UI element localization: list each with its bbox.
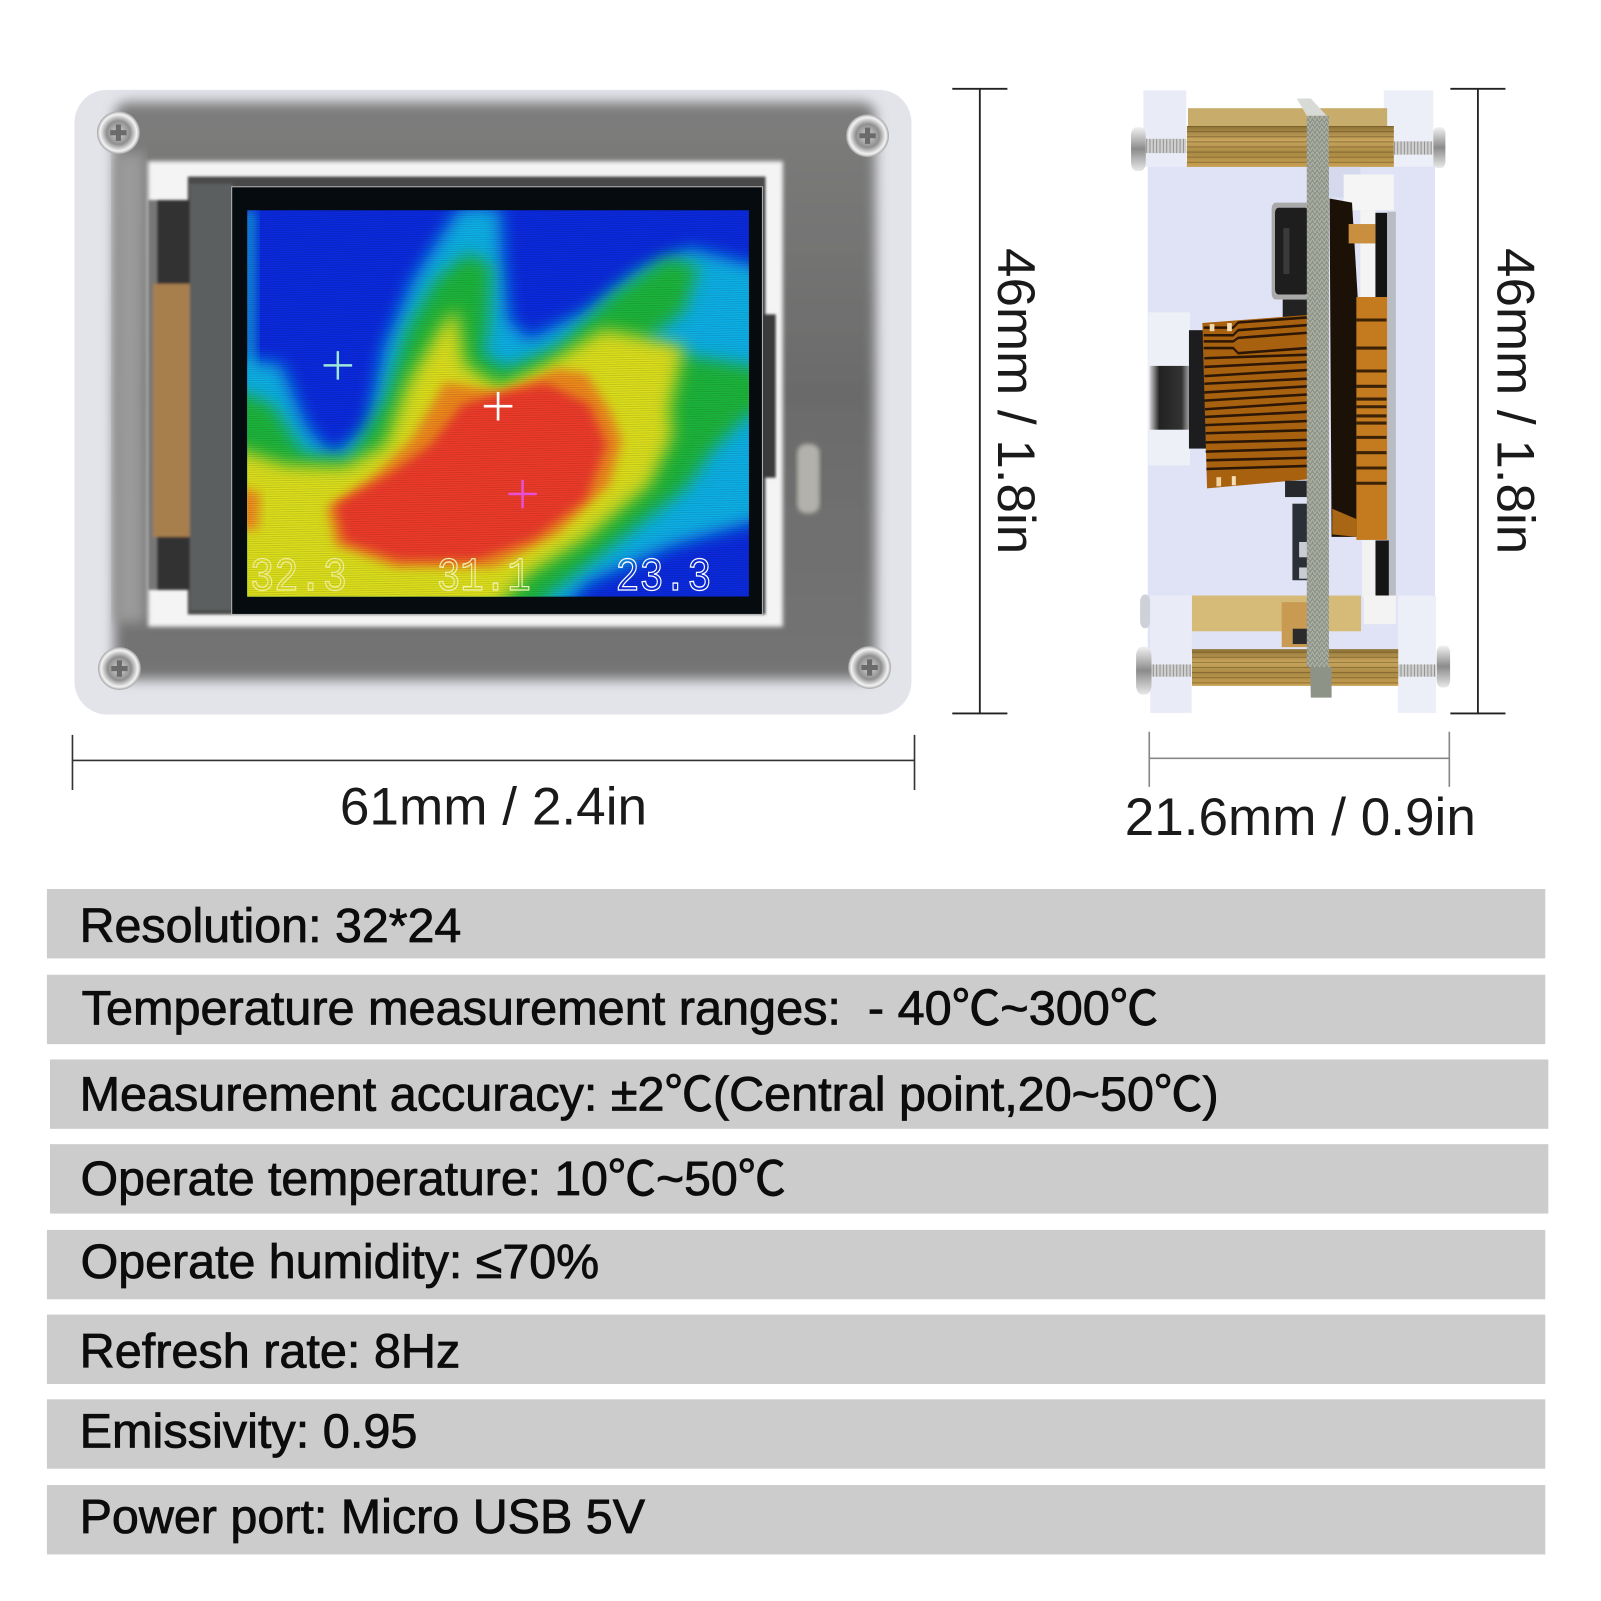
dark centre of the shell — [114, 102, 876, 680]
lens acrylic reflection — [1148, 312, 1209, 465]
screw: top right — [846, 114, 889, 157]
spec row: resolution — [47, 889, 1545, 958]
spec row: refresh rate: Refresh rate: 8Hz — [80, 1326, 460, 1379]
spec row: operating temperature: Operate temperature: 10℃~50℃ — [81, 1153, 786, 1206]
depth label: 21.6mm / 0.9in — [1125, 788, 1476, 847]
height label, front: 46mm / 1.8in — [986, 248, 1045, 554]
spec row: operating temperature — [50, 1144, 1548, 1214]
spec row: accuracy — [50, 1059, 1548, 1129]
front view of the device — [75, 90, 911, 714]
spec row: emissivity: Emissivity: 0.95 — [80, 1405, 417, 1458]
bottom left acrylic block — [1150, 596, 1192, 713]
left ribbon cable — [1202, 315, 1308, 497]
lighter left side of the shell — [114, 153, 145, 623]
small circuit board — [1282, 504, 1309, 647]
screw: bottom left — [98, 647, 141, 690]
micro USB connector — [1272, 203, 1310, 320]
spec row: temperature range: Temperature measurement ranges: - 40℃~300℃ — [82, 983, 1158, 1036]
display module backing — [148, 177, 776, 614]
reading: 23.3: 23.3 — [615, 552, 711, 605]
spec row: accuracy: Measurement accuracy: ±2℃(Central point,20~50℃) — [80, 1068, 1219, 1121]
side slot — [797, 444, 820, 513]
screw: bottom right — [848, 646, 891, 689]
spec row: refresh rate — [47, 1315, 1545, 1384]
side view of the device — [1131, 90, 1450, 713]
central main board edge — [1297, 98, 1332, 698]
dimension: device height, side — [1450, 89, 1544, 713]
screw: top left — [97, 111, 140, 154]
spec row: humidity: Operate humidity: ≤70% — [81, 1236, 599, 1289]
thermal image — [247, 210, 749, 597]
rear brass spacers — [1188, 108, 1387, 631]
acrylic back plate — [1148, 162, 1435, 652]
dimension: device height, front — [952, 89, 1045, 713]
display stack on the right — [1329, 167, 1396, 624]
frosted outer shell — [75, 90, 911, 714]
width label: 61mm / 2.4in — [340, 778, 647, 837]
right ribbon cable — [1330, 199, 1387, 540]
crosshair: hottest point — [508, 480, 537, 508]
height label, side: 46mm / 1.8in — [1485, 248, 1544, 554]
spec row: power port — [47, 1485, 1545, 1554]
bottom right acrylic block — [1398, 596, 1436, 713]
bottom brass spacer — [1192, 649, 1398, 686]
spec row: temperature range — [47, 975, 1545, 1044]
spec row: emissivity — [47, 1399, 1545, 1469]
reading: 32.3: 32.3 — [250, 552, 347, 605]
dimension: device width — [72, 735, 915, 837]
white frame behind the screen — [148, 161, 783, 627]
crosshair: centre point — [484, 392, 512, 421]
top brass spacer — [1187, 126, 1394, 167]
screws and threads — [1131, 127, 1450, 695]
spec row: humidity — [47, 1230, 1545, 1299]
dimension: device depth — [1125, 732, 1476, 847]
screen bezel — [232, 187, 762, 614]
top left acrylic block — [1143, 90, 1186, 167]
spec row: power port: Power port: Micro USB 5V — [80, 1491, 645, 1544]
spec row: resolution: Resolution: 32*24 — [80, 900, 461, 953]
top right acrylic block — [1384, 90, 1433, 167]
reading: 31.1: 31.1 — [437, 552, 531, 605]
crosshair: coldest point — [324, 351, 352, 380]
